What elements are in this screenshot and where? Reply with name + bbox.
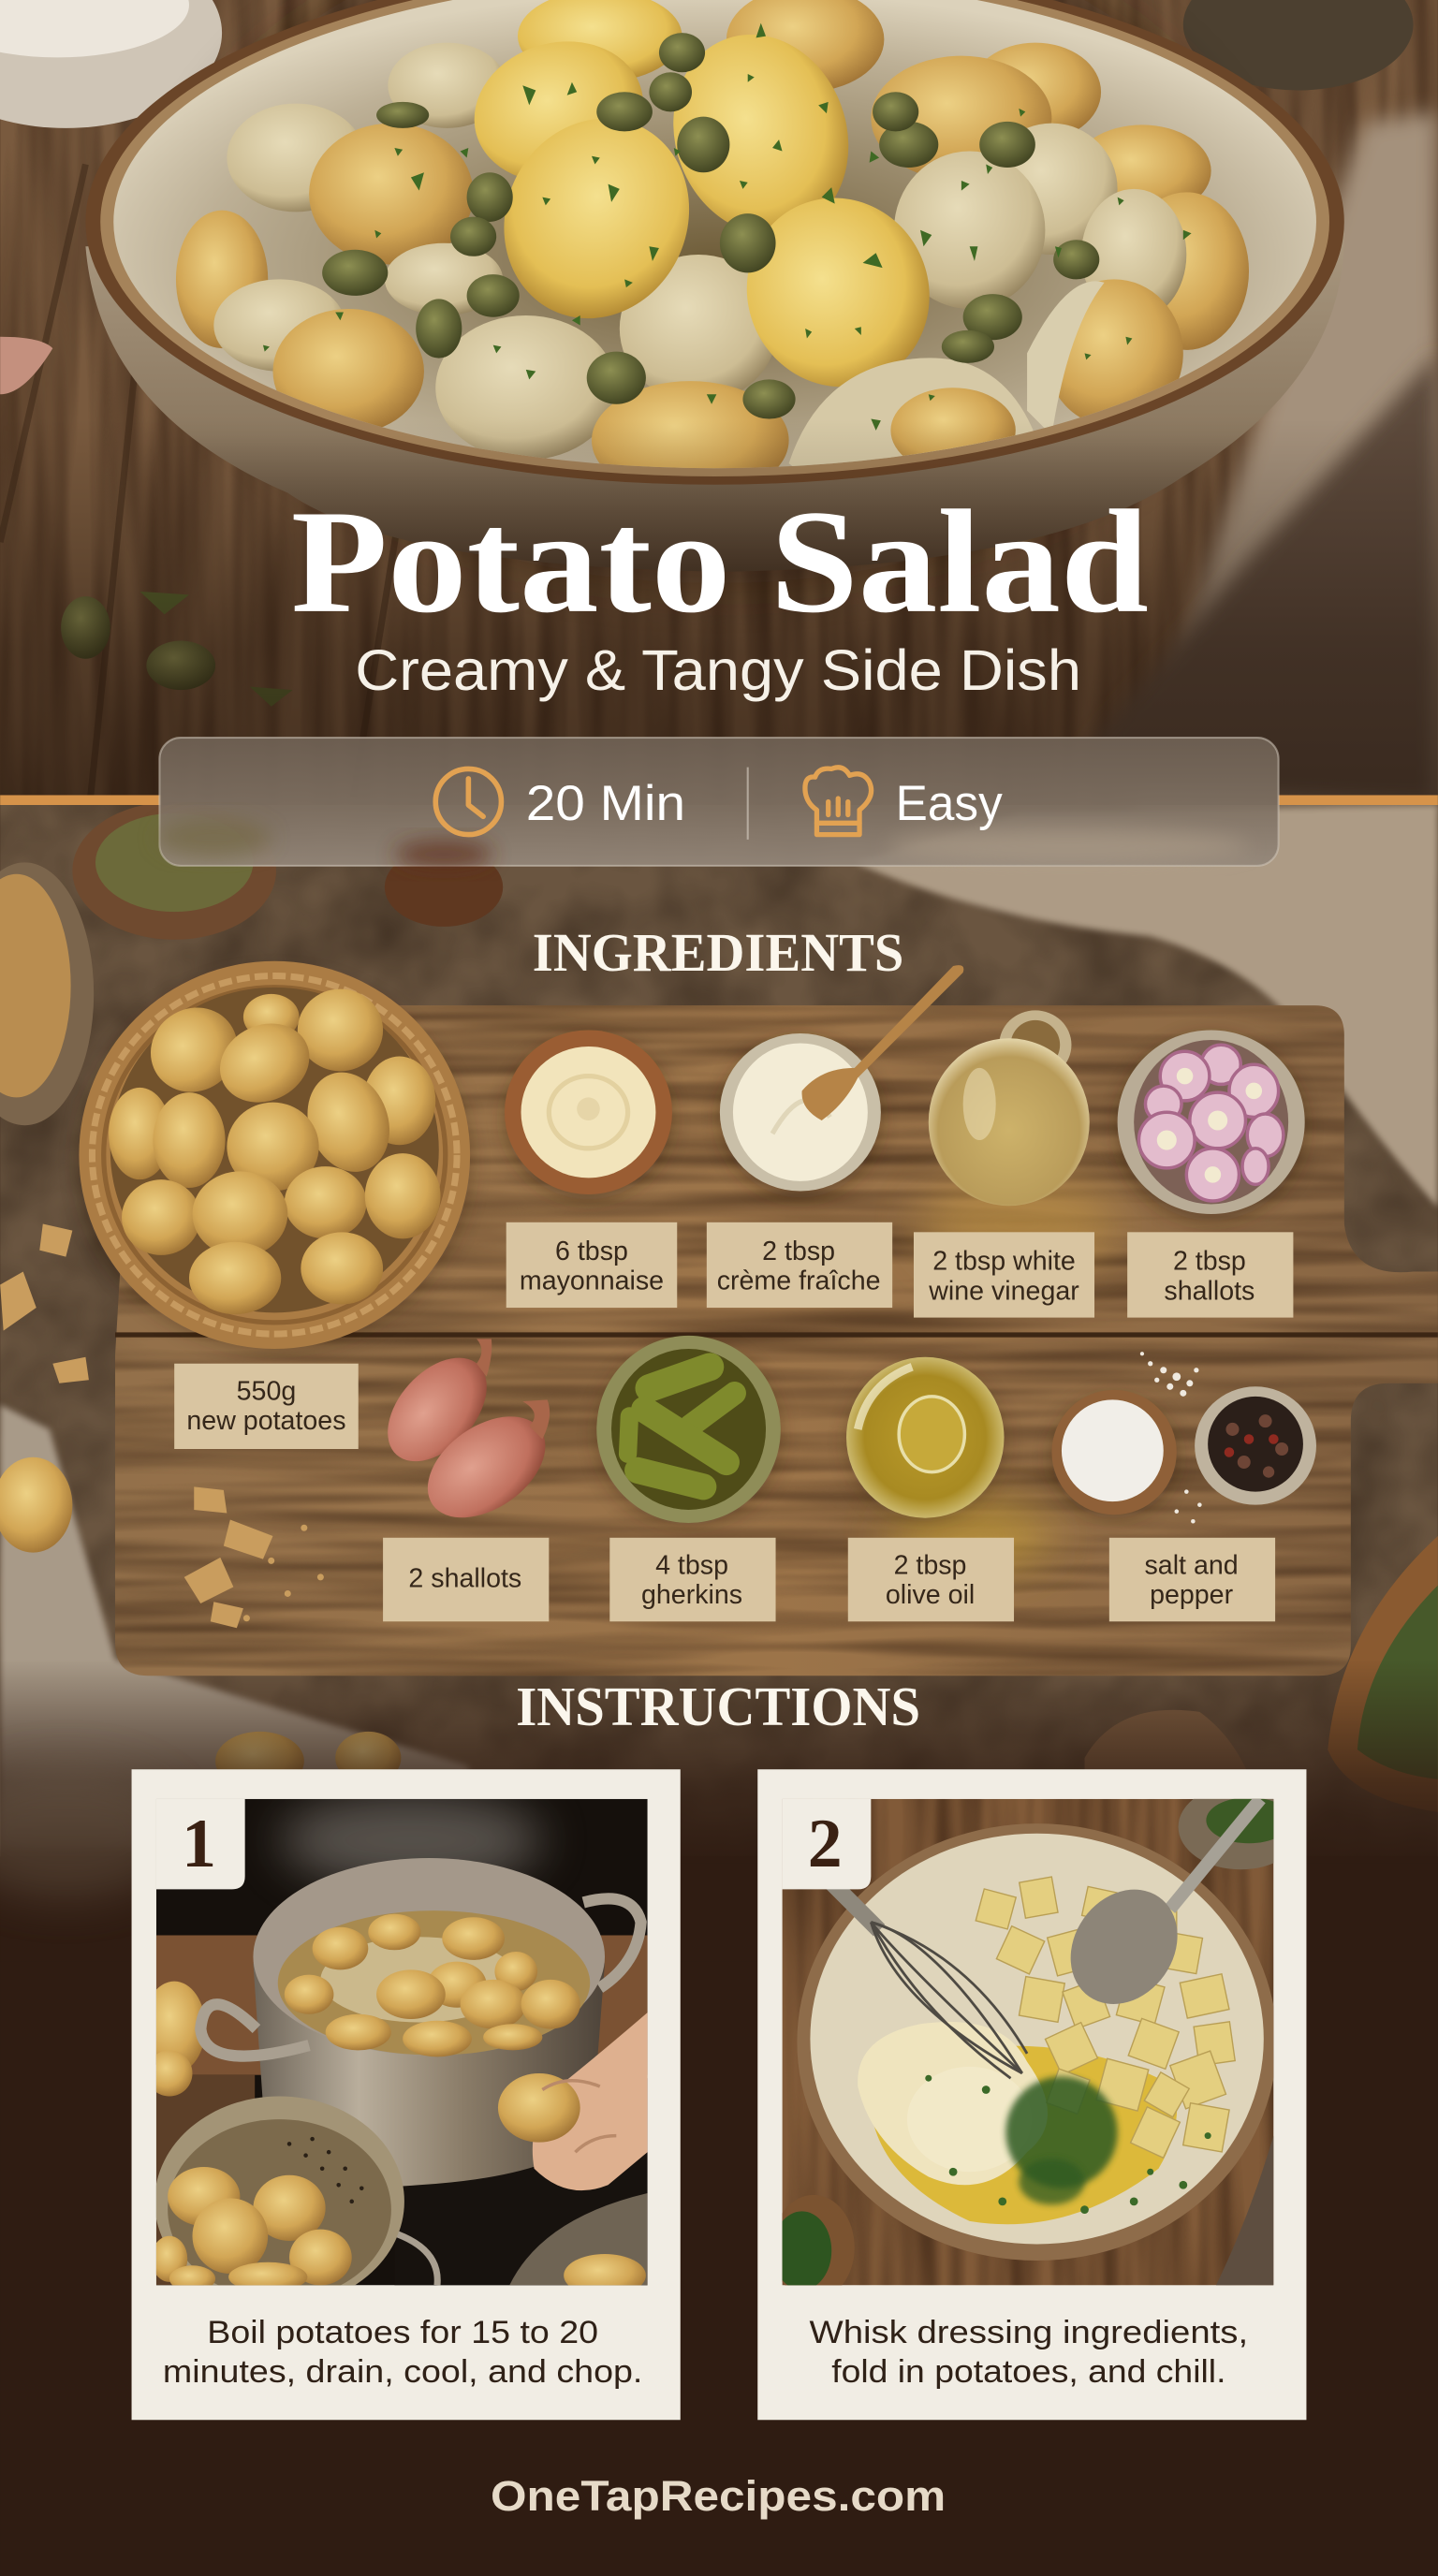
label: shallots tbsp: 2 tbsp (1173, 1247, 1246, 1277)
label: shallots: 2 shallots (408, 1563, 521, 1593)
ingredient: mayonnaise (505, 1030, 672, 1199)
hero salad bowl (85, 0, 1344, 583)
step 1 badge: 1 (182, 1805, 216, 1881)
label: shallots tbsp: shallots (1164, 1276, 1255, 1306)
step 1 photo: boiling potatoes (143, 1794, 648, 2306)
ingredient: olive oil (846, 1357, 1005, 1521)
label: mayonnaise: 6 tbsp (555, 1237, 628, 1266)
label: olive oil: olive oil (886, 1580, 975, 1610)
label: new potatoes: new potatoes (186, 1406, 346, 1436)
time label: 20 Min (526, 776, 685, 831)
ingredient: sliced shallots (1118, 1030, 1305, 1221)
whisk (829, 1881, 879, 1930)
accent line (0, 795, 1438, 805)
step 2 text: Whisk dressing ingredients, (810, 2315, 1248, 2350)
spilled salt (1140, 1352, 1202, 1524)
label: olive oil: 2 tbsp (894, 1550, 966, 1580)
wooden spoon (802, 965, 963, 1120)
label: new potatoes: 550g (237, 1376, 296, 1406)
step 1 badge (156, 1799, 245, 1889)
cutting board (115, 1005, 1438, 1676)
label: creme fraiche: 2 tbsp (762, 1237, 835, 1266)
step 2 text: fold in potatoes, and chill. (831, 2354, 1225, 2390)
bowl potatoes (176, 0, 1249, 500)
step 1 card (132, 1769, 681, 2420)
label: salt and pepper: salt and (1145, 1550, 1239, 1580)
label: vinegar: 2 tbsp white (932, 1247, 1076, 1277)
label: vinegar: wine vinegar (928, 1276, 1079, 1306)
ingredient: white wine vinegar (929, 1010, 1090, 1206)
chopped herbs (925, 2075, 1211, 2214)
label: creme fraiche (707, 1222, 892, 1308)
label: olive oil (848, 1538, 1014, 1621)
crumbs (0, 1224, 324, 1628)
icon: chef hat (805, 768, 872, 835)
icon: clock (435, 768, 501, 835)
step 1 text: minutes, drain, cool, and chop. (163, 2354, 642, 2390)
title: Potato Salad (291, 480, 1149, 644)
label: vinegar (914, 1232, 1094, 1318)
parsley flecks (263, 23, 1192, 431)
ingredient: gherkins jar (596, 1336, 781, 1525)
label: gherkins: gherkins (641, 1580, 742, 1610)
ingredient: peppercorns (1140, 1352, 1316, 1524)
label: salt and pepper (1109, 1538, 1275, 1621)
ingredient: salt (1051, 1390, 1177, 1518)
step 1 text: Boil potatoes for 15 to 20 (207, 2315, 598, 2350)
label: gherkins (609, 1538, 776, 1621)
label: mayonnaise (506, 1222, 677, 1308)
footer website: OneTapRecipes.com (491, 2472, 946, 2520)
label: shallots tbsp (1127, 1232, 1293, 1318)
label: shallots (383, 1538, 549, 1621)
wicker basket of potatoes (79, 961, 470, 1349)
label: gherkins: 4 tbsp (655, 1550, 728, 1580)
step 2 card (757, 1769, 1306, 2420)
subtitle: Creamy & Tangy Side Dish (355, 638, 1081, 703)
info bar (156, 738, 1279, 869)
ingredient: creme fraiche (720, 965, 963, 1197)
label: salt and pepper: pepper (1150, 1580, 1234, 1610)
ingredients heading: INGREDIENTS (533, 922, 903, 983)
step 2 badge (783, 1799, 871, 1889)
label: creme fraiche: crème fraîche (717, 1266, 881, 1296)
difficulty label: Easy (896, 776, 1003, 831)
dark gradient behind title (0, 419, 1438, 805)
ingredient: whole shallots (369, 1339, 564, 1539)
spoon (1170, 1799, 1260, 1909)
capers (322, 33, 1099, 419)
step 2 photo: whisking dressing (783, 1799, 1273, 2286)
label: mayonnaise: mayonnaise (520, 1266, 664, 1296)
instructions heading: INSTRUCTIONS (516, 1676, 920, 1737)
label: new potatoes (174, 1364, 359, 1449)
step 2 badge: 2 (808, 1805, 843, 1881)
